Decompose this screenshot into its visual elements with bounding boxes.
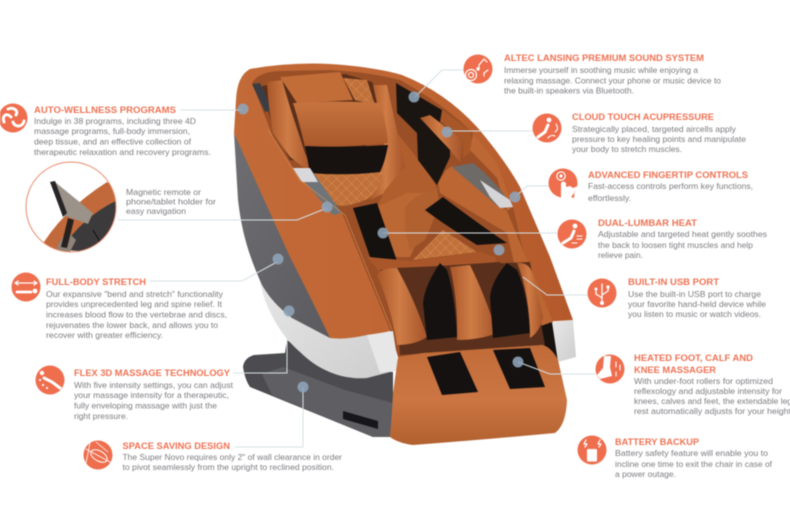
left silver corner [367,331,399,373]
text block: magnetic remote: phone/tablet holder for [126,196,216,206]
body text: pressure to key healing points and manipulate [572,134,746,144]
inset photo [43,180,116,252]
heading: DUAL-LUMBAR HEAT [598,218,697,229]
icon: seated figure with waves [532,114,562,142]
text block: magnetic remote: Magnetic remote or [126,187,201,197]
chair interior [252,70,553,357]
left calf roll [377,268,427,345]
right console [452,163,513,208]
heading: FLEX 3D MASSAGE TECHNOLOGY [74,368,231,379]
right calf black [490,263,530,338]
heading [634,353,753,376]
body text: recover with greater efficiency. [46,330,163,340]
grey side panel [234,133,345,338]
body text: Strategically placed, targeted aircells apply [572,124,737,134]
body text: The Super Novo requires only 2" of wall clearance in order [122,452,342,462]
body text: relieve pain. [598,250,643,260]
body text: rest automatically adjusts for your height [634,406,790,416]
body text: incline one time to exit the chair in case of [615,459,773,469]
body text: effortlessly. [588,193,631,203]
body text: relaxing massage. Connect your phone or music device to [504,76,721,86]
right side bolster [370,85,405,200]
pillow black band [305,145,388,174]
quilted seat [413,230,477,260]
hotspot dots [238,92,524,392]
body text [504,65,721,96]
leader lines [118,70,595,447]
right rim highlight [470,133,513,211]
feature: advanced fingertip controls [548,168,753,203]
chair base [243,340,393,437]
body text [46,289,227,340]
left console [293,168,342,215]
footrest [390,345,567,445]
feature: cloud touch acupressure [532,112,746,154]
shadow behind head area [262,74,395,165]
heading: KNEE MASSAGER [634,365,716,376]
black seat strip right [425,197,507,245]
body text: reflexology and adjustable intensity for [634,386,782,396]
heading: BATTERY BACKUP [615,437,700,448]
body text: Adjustable and targeted heat gently soothes [598,229,767,239]
feature: battery backup [578,436,773,479]
body text: provides unprecedented leg and spine relief. It [46,299,223,309]
seat side stitched panel [405,190,440,250]
chair shell [234,64,573,339]
inset: magnetic holder detail [26,162,118,252]
feature: auto-wellness programs [0,104,211,157]
body text: Our expansive "bend and stretch" functionality [46,289,224,299]
body text [598,229,767,260]
body text [122,452,342,472]
icon: foot [596,354,624,384]
quilted lumbar [310,172,383,206]
heading: ALTEC LANSING PREMIUM SOUND SYSTEM [504,53,704,64]
heading: ADVANCED FINGERTIP CONTROLS [588,170,749,181]
right calf roll [517,263,543,338]
icon: seated figure with heat [558,220,586,248]
body text: knees, calves and feet, the extendable leg [634,396,790,406]
body text [628,289,766,319]
feature: dual-lumbar heat [558,218,767,260]
centre calf roll [450,265,497,340]
icon: music notes [464,54,492,84]
body text: you listen to music or watch videos. [628,309,761,319]
body text: Indulge in 38 programs, including three 4D [34,116,196,126]
heading: FULL-BODY STRETCH [46,277,146,288]
icon: pivoting chair [84,440,112,470]
right lower black gap [530,322,558,362]
body text: massage programs, full-body immersion, [34,126,190,136]
body text: Immerse yourself in soothing music while enjoying a [504,65,698,75]
left arm stitch [268,130,392,330]
right outer bolster [440,110,473,158]
body text [588,181,753,203]
body text: therapeutic relaxation and recovery programs. [34,147,211,157]
inset ring [26,162,116,252]
body text: Battery safety feature will enable you to [615,448,768,458]
body text: increases blood flow to the vertebrae and discs, [46,310,227,320]
heading: BUILT-IN USB PORT [628,277,719,288]
body text: the built-in speakers via Bluetooth. [504,86,634,96]
body text: your body to stretch muscles. [572,144,682,154]
body text [634,376,790,416]
black seat strip left [353,203,397,261]
right arm black panels [396,83,450,185]
body text: With five intensity settings, you can adjust [74,380,234,390]
icon: reclined body [36,366,64,394]
body text [572,124,746,154]
icon: USB symbol [588,278,616,308]
icon: stretch arrows [12,272,40,302]
body text: fully enveloping massage with just the [74,400,217,410]
body text: rejuvenates the lower back, and allows you to [46,320,218,330]
body text: your favorite hand-held device while [628,299,766,309]
body text: to pivot seamlessly from the upright to reclined position. [122,462,334,472]
silver side band [258,270,398,378]
icon: finger press [548,168,578,199]
text block: magnetic remote [126,187,216,216]
body text [615,448,773,479]
body text: With under-foot rollers for optimized [634,376,773,386]
right silver trim [552,320,576,362]
foot well left [427,352,478,395]
heading: CLOUD TOUCH ACUPRESSURE [572,112,715,123]
feature: space saving design [84,440,342,472]
heading: AUTO-WELLNESS PROGRAMS [34,105,177,116]
body text: deep tissue, and an effective collection of [34,136,192,146]
body text: Use the built-in USB port to charge [628,289,761,299]
massage chair illustration [234,64,576,445]
body text [74,380,234,421]
icon: swirl [0,104,28,132]
seat front [367,252,497,272]
pillow [293,102,388,147]
feature: altec lansing sound [464,53,721,96]
body text: Fast-access controls perform key functions, [588,181,753,191]
heading: HEATED FOOT, CALF AND [634,353,753,364]
feature: heated foot, calf and knee massager [596,353,790,416]
right arm pad [420,115,463,162]
body text: a power outage. [615,469,676,479]
body text [34,116,211,157]
body text: your massage intensity for a therapeutic, [74,390,229,400]
feature: flex 3D massage [36,366,234,421]
headrest [280,72,353,103]
body text: the back to loosen tight muscles and help [598,240,753,250]
torso lining [377,133,438,207]
text block: magnetic remote: easy navigation [126,206,186,216]
foot well right [493,348,545,389]
left wing pad [267,80,313,170]
feature: built-in USB port [588,277,766,319]
seat centre [377,193,437,257]
body text: right pressure. [74,411,128,421]
left top black panel [252,83,273,112]
legrest backing [395,262,545,355]
feature: full-body stretch [12,272,227,340]
icon: battery [578,436,606,464]
upper quilted side [343,78,375,105]
right arm rest [438,166,553,330]
left calf black [423,263,457,340]
heading: SPACE SAVING DESIGN [122,441,230,452]
